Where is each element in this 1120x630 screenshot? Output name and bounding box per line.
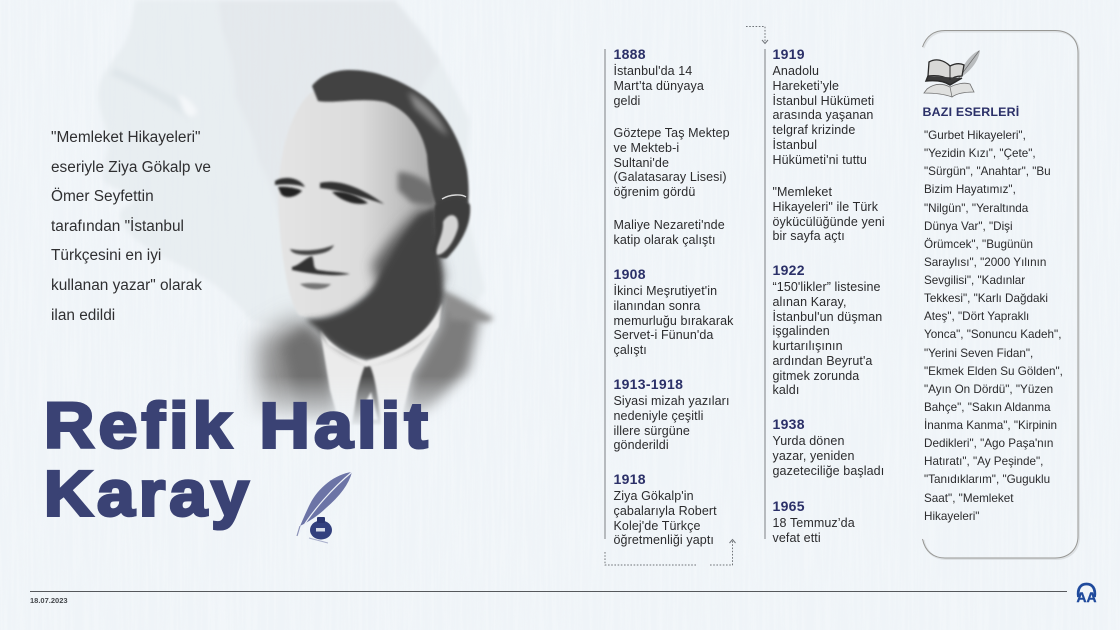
mustache and mouth	[292, 256, 350, 275]
1922: gitmek zorunda	[772, 368, 859, 382]
1919: İstanbul	[772, 138, 817, 152]
1908: ilanından sonra	[614, 299, 700, 313]
1888: Göztepe Taş Mektep	[614, 126, 730, 140]
works list: Sevgilisi", "Kadınlar	[924, 274, 1025, 287]
1919: 1919	[772, 46, 805, 62]
1888: Maliye Nezareti'nde	[614, 218, 725, 232]
1919: bir sayfa açtı	[772, 229, 845, 243]
collar edge over neck	[320, 303, 442, 367]
works list: Hikayeleri"	[924, 510, 979, 523]
1908: İkinci Meşrutiyet'in	[614, 284, 717, 298]
arrow: top connector	[746, 26, 768, 44]
1888: Mart’ta dünyaya	[614, 79, 704, 93]
intro quote text: tarafından "İstanbul	[51, 218, 184, 235]
intro quote text: Türkçesini en iyi	[51, 247, 161, 264]
works list: "Nilgün", "Yeraltında	[924, 202, 1028, 214]
works list: Örümcek", "Bugünün	[924, 238, 1033, 251]
1908: 1908	[614, 266, 646, 282]
works list: Dünya Var", "Dişi	[924, 220, 1013, 233]
1965: 18 Temmuz’da	[772, 516, 855, 530]
works list: Yonca", "Sonuncu Kadeh",	[924, 328, 1061, 341]
works list	[924, 129, 1063, 523]
1938: gazeteciliğe başladı	[772, 464, 884, 478]
1918: Ziya Gökalp'in	[614, 489, 694, 503]
intro quote text: kullanan yazar" olarak	[51, 277, 202, 294]
neck shadow	[372, 205, 445, 320]
1938: 1938	[772, 416, 805, 432]
title: Refik Halit Karay: Karay	[44, 458, 253, 530]
1922: 1922	[772, 262, 805, 278]
footer rule	[30, 590, 1067, 592]
works list: "Tanıdıklarım", "Guguklu	[924, 473, 1050, 486]
1919: İstanbul Hükümeti	[772, 94, 874, 108]
1908	[614, 266, 734, 357]
1918: çabalarıyla Robert	[614, 504, 717, 518]
works list: "Yerini Seven Fidan",	[924, 346, 1033, 360]
works list: Ateş", "Dört Yapraklı	[924, 310, 1029, 323]
1888: 1888	[614, 46, 646, 62]
title: Refik Halit Karay: Refik Halit	[44, 390, 432, 462]
ear	[432, 198, 470, 258]
1938: Yurda dönen	[772, 434, 844, 448]
intro quote text	[51, 129, 211, 324]
1919: öykücülüğünde yeni	[772, 214, 885, 228]
intro quote text: eseriyle Ziya Gökalp ve	[51, 159, 211, 176]
intro quote text: Ömer Seyfettin	[51, 188, 154, 205]
1888: ve Mekteb-i	[614, 141, 679, 155]
icon: books and quill	[923, 50, 980, 98]
works list: Saat", "Memleket	[924, 492, 1014, 504]
face	[278, 92, 440, 318]
works list: Bizim Hayatımız",	[924, 183, 1016, 196]
works list: "Ayın On Dördü", "Yüzen	[924, 383, 1053, 396]
1913-1918: Siyasi mizah yazıları	[614, 394, 730, 408]
1965: vefat etti	[772, 531, 821, 545]
works list: Bahçe", "Sakın Aldanma	[924, 401, 1051, 414]
1888: İstanbul'da 14	[614, 64, 692, 78]
1888: katip olarak çalıştı	[614, 233, 716, 247]
heading: Bazı Eserleri: BAZI ESERLERİ	[922, 105, 1019, 119]
1919	[772, 46, 885, 243]
1938: yazar, yeniden	[772, 449, 855, 463]
1922: kaldı	[772, 383, 799, 397]
timeline column 2	[772, 46, 885, 545]
1922	[772, 262, 882, 397]
works list: Hatıratı", "Ay Peşinde",	[924, 455, 1043, 468]
1888: (Galatasaray Lisesi)	[614, 170, 727, 184]
1919: Hikayeleri" ile Türk	[772, 200, 878, 214]
eyebrows and eyes	[275, 178, 305, 187]
1922: ardından Beyrut'a	[772, 354, 872, 368]
intro quote text: ilan edildi	[51, 307, 115, 324]
1908: çalıştı	[614, 343, 647, 357]
mottled temple shading	[398, 172, 436, 207]
1922: işgalinden	[772, 324, 830, 338]
panel: selected works	[922, 30, 1080, 560]
1919: Anadolu	[772, 64, 819, 78]
portrait of Refik Halit Karay	[242, 68, 496, 424]
logo: AA: AA	[1076, 589, 1096, 605]
1965: 1965	[772, 498, 805, 514]
1913-1918: nedeniyle çeşitli	[614, 409, 703, 423]
1919: Hareketi’yle	[772, 79, 839, 93]
1888: geldi	[614, 94, 640, 108]
works list: İnanma Kanma", "Kirpinin	[924, 419, 1057, 432]
1918: öğretmenliği yaptı	[614, 533, 714, 547]
1938	[772, 416, 884, 478]
1922: İstanbul'un düşman	[772, 310, 882, 324]
1922: alınan Karay,	[772, 295, 847, 309]
1918: 1918	[614, 471, 646, 487]
nose	[290, 245, 334, 255]
timeline column 1	[614, 46, 734, 547]
1913-1918: 1913-1918	[614, 376, 683, 392]
works list: "Yezidin Kızı", "Çete",	[924, 147, 1036, 160]
1888: Sultani'de	[614, 156, 669, 170]
1913-1918	[614, 376, 730, 452]
works list: "Gurbet Hikayeleri",	[924, 129, 1026, 142]
1919: arasında yaşanan	[772, 108, 873, 122]
works list: "Sürgün", "Anahtar", "Bu	[924, 165, 1051, 178]
1888	[614, 46, 730, 247]
1913-1918: illere sürgüne	[614, 424, 690, 438]
date: 18.07.2023	[30, 596, 68, 605]
1965	[772, 498, 855, 545]
works list: Saraylısı", "2000 Yılının	[924, 256, 1046, 269]
intro quote text: "Memleket Hikayeleri"	[51, 129, 200, 146]
1908: Servet-i Fünun'da	[614, 328, 713, 342]
works list: Tekkesi", "Karlı Dağdaki	[924, 292, 1048, 305]
1888: öğrenim gördü	[614, 185, 695, 199]
suit	[258, 290, 494, 425]
tie	[352, 362, 381, 425]
1919: "Memleket	[772, 185, 832, 199]
works list: Dedikleri", "Ago Paşa'nın	[924, 437, 1053, 450]
1918: Kolej'de Türkçe	[614, 518, 701, 532]
hair	[312, 70, 469, 205]
shirt	[320, 310, 442, 414]
1922: kurtarılışının	[772, 339, 843, 353]
1919: telgraf krizinde	[772, 123, 855, 137]
1908: memurluğu bırakarak	[614, 314, 734, 328]
1918	[614, 471, 717, 547]
works list: "Ekmek Elden Su Gölden",	[924, 365, 1063, 378]
1913-1918: gönderildi	[614, 438, 669, 452]
1919: Hükümeti'ni tuttu	[772, 152, 867, 166]
panel outline	[922, 30, 1080, 560]
arrow: bottom connector	[605, 540, 736, 565]
1922: “150'likler” listesine	[772, 280, 881, 294]
